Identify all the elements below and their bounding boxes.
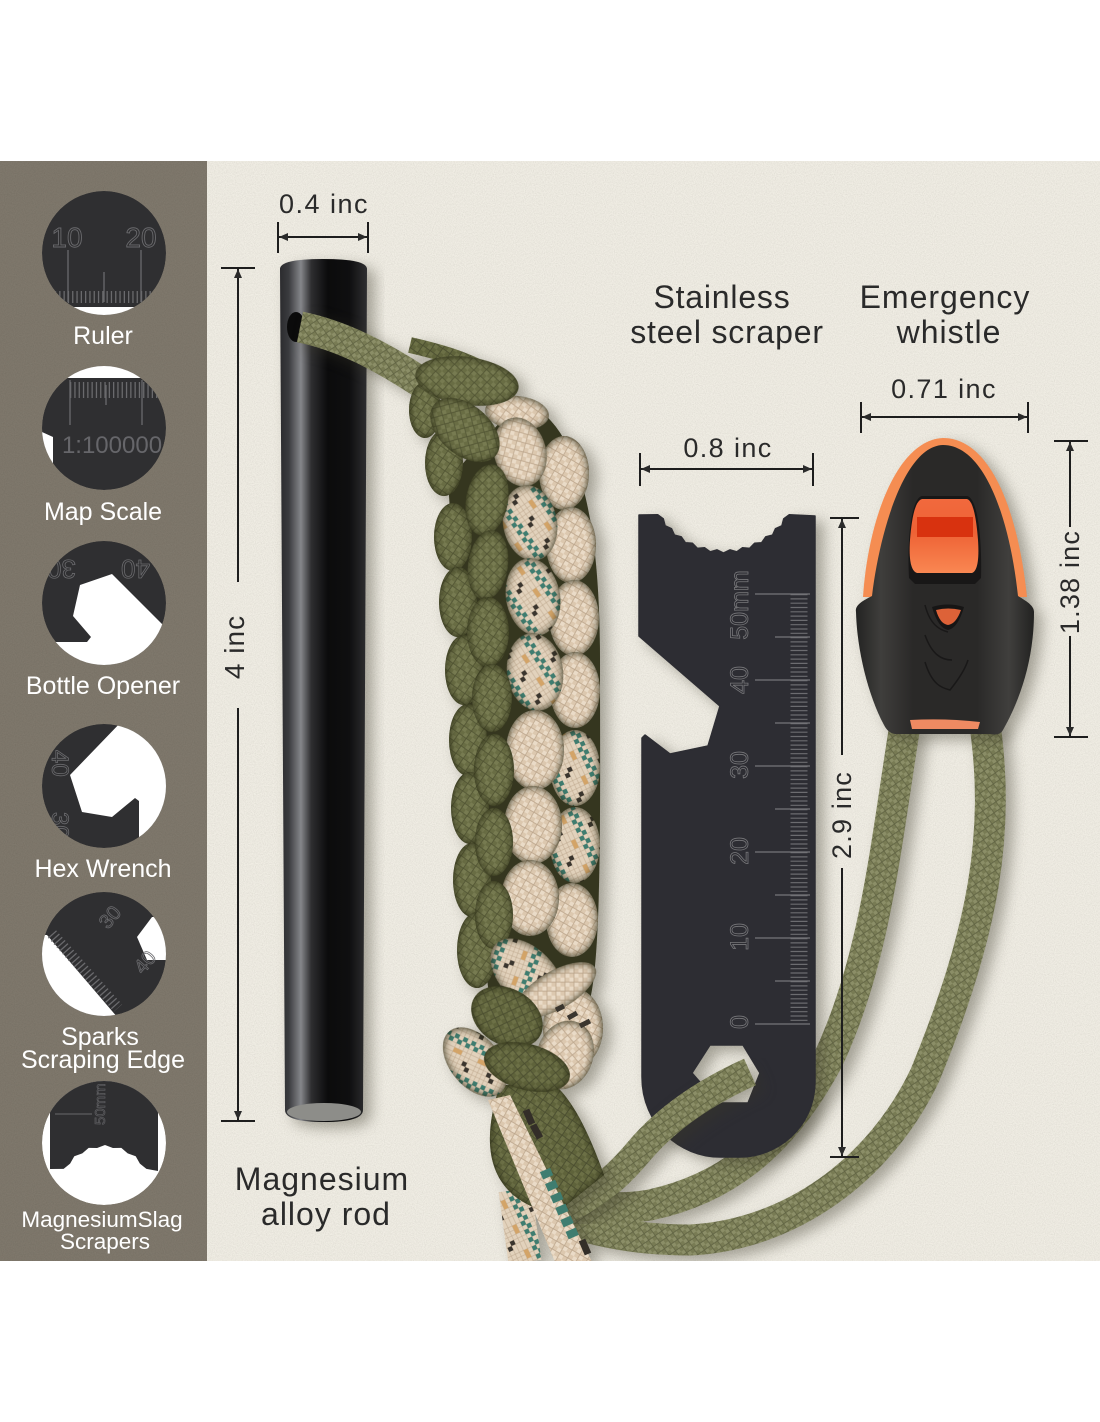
sidebar [0,161,207,1261]
icon: magnesium slag scrapers [42,1075,166,1205]
icon: sparks scraping edge [30,892,170,1020]
label: Sparks Scraping Edge [21,1023,185,1074]
label: Magnesium alloy rod [235,1161,409,1232]
scraper ruler scale: 30 [726,751,754,779]
icon: bottle opener: 40 [121,554,150,584]
label: Emergency whistle: Emergency [860,279,1030,315]
camo braid lobes [483,393,600,957]
dimension: 1.38 inc: 1.38 inc [1055,530,1085,634]
scraper ruler scale: 10 [726,923,754,951]
panel: main product area [0,161,1100,1262]
label: Emergency whistle: whistle [896,314,1001,350]
whistle bottom orange strip [910,719,980,729]
icon: map scale [38,362,170,490]
icon: ruler [40,191,170,319]
label: Stainless steel scraper [630,279,824,350]
scraper ruler scale: 0 [726,1015,754,1029]
lower camo strand [515,1190,525,1262]
braid backing [448,400,600,1000]
dimension: 4 inc [219,268,255,1121]
scraper ruler scale: 50mm [726,570,754,640]
label: Magnesium alloy rod: Magnesium [235,1161,409,1197]
icon: hex wrench: 30 [46,812,73,839]
whistle clip and shell body [856,445,1034,734]
dimension: 0.71 inc [861,374,1028,433]
dimension: 1.38 inc [1054,441,1088,737]
label: Emergency whistle [862,286,1030,344]
label: MagnesiumSlag Scrapers: Scrapers [60,1229,150,1254]
bottom knot [430,925,604,1262]
label: MagnesiumSlag Scrapers: MagnesiumSlag [21,1207,183,1232]
long whistle cords [570,725,990,1240]
label: Stainless steel scraper: Stainless [653,279,791,315]
cord from rod hole [300,327,425,385]
icon: bottle opener [40,541,170,670]
dimension: 0.4 inc: 0.4 inc [279,189,369,219]
label: Hex Wrench: Hex Wrench [34,855,172,883]
cord threaded through scraper hole [560,1072,750,1210]
dimension: 4 inc: 4 inc [219,615,250,679]
lower olive loop [490,1085,604,1214]
icon: sparks scraping edge: 40 [130,947,161,978]
dimension: 0.8 inc [640,433,813,486]
whistle embossed logo [925,605,968,690]
whistle small triangle mark [932,604,964,630]
top knot [409,350,522,475]
dimension: 0.71 inc: 0.71 inc [891,374,997,404]
whistle orange window [909,496,981,584]
icon: magnesium slag scrapers: 50mm [92,1083,109,1125]
label: Sparks Scraping Edge: Scraping Edge [21,1046,185,1074]
label: Map Scale: Map Scale [44,498,162,526]
magnesium alloy rod [280,259,367,1122]
dimension: 2.9 inc [827,518,859,1157]
emergency whistle [856,438,1034,734]
label: Bottle Opener: Bottle Opener [26,672,180,700]
scraper ruler scale: 40 [726,666,754,694]
olive braid lobes [425,430,497,988]
label: MagnesiumSlag Scrapers [21,1207,183,1254]
icon: bottle opener: 30 [47,554,76,584]
icon: ruler: 10 [51,222,83,253]
label: Stainless steel scraper: steel scraper [630,314,824,350]
label: Sparks Scraping Edge: Sparks [61,1023,139,1051]
olive inner lobes [466,464,514,949]
scraper ruler scale [726,570,810,1029]
icon: hex wrench: 40 [46,750,73,777]
label: Magnesium alloy rod: alloy rod [261,1196,391,1232]
label: Ruler: Ruler [73,322,133,350]
stainless steel scraper [639,515,815,1157]
dimension: 0.4 inc [278,189,369,253]
scraper ruler scale: 20 [726,837,754,865]
icon: map scale: 1:100000 [62,432,162,459]
dimension: 2.9 inc: 2.9 inc [827,771,857,859]
dimension: 0.8 inc: 0.8 inc [683,433,773,463]
icon: ruler: 20 [125,222,157,253]
whistle orange rim [863,438,1027,597]
icon: sparks scraping edge: 30 [95,902,126,933]
paracord bracelet [300,327,604,1262]
icon: hex wrench [42,720,175,848]
